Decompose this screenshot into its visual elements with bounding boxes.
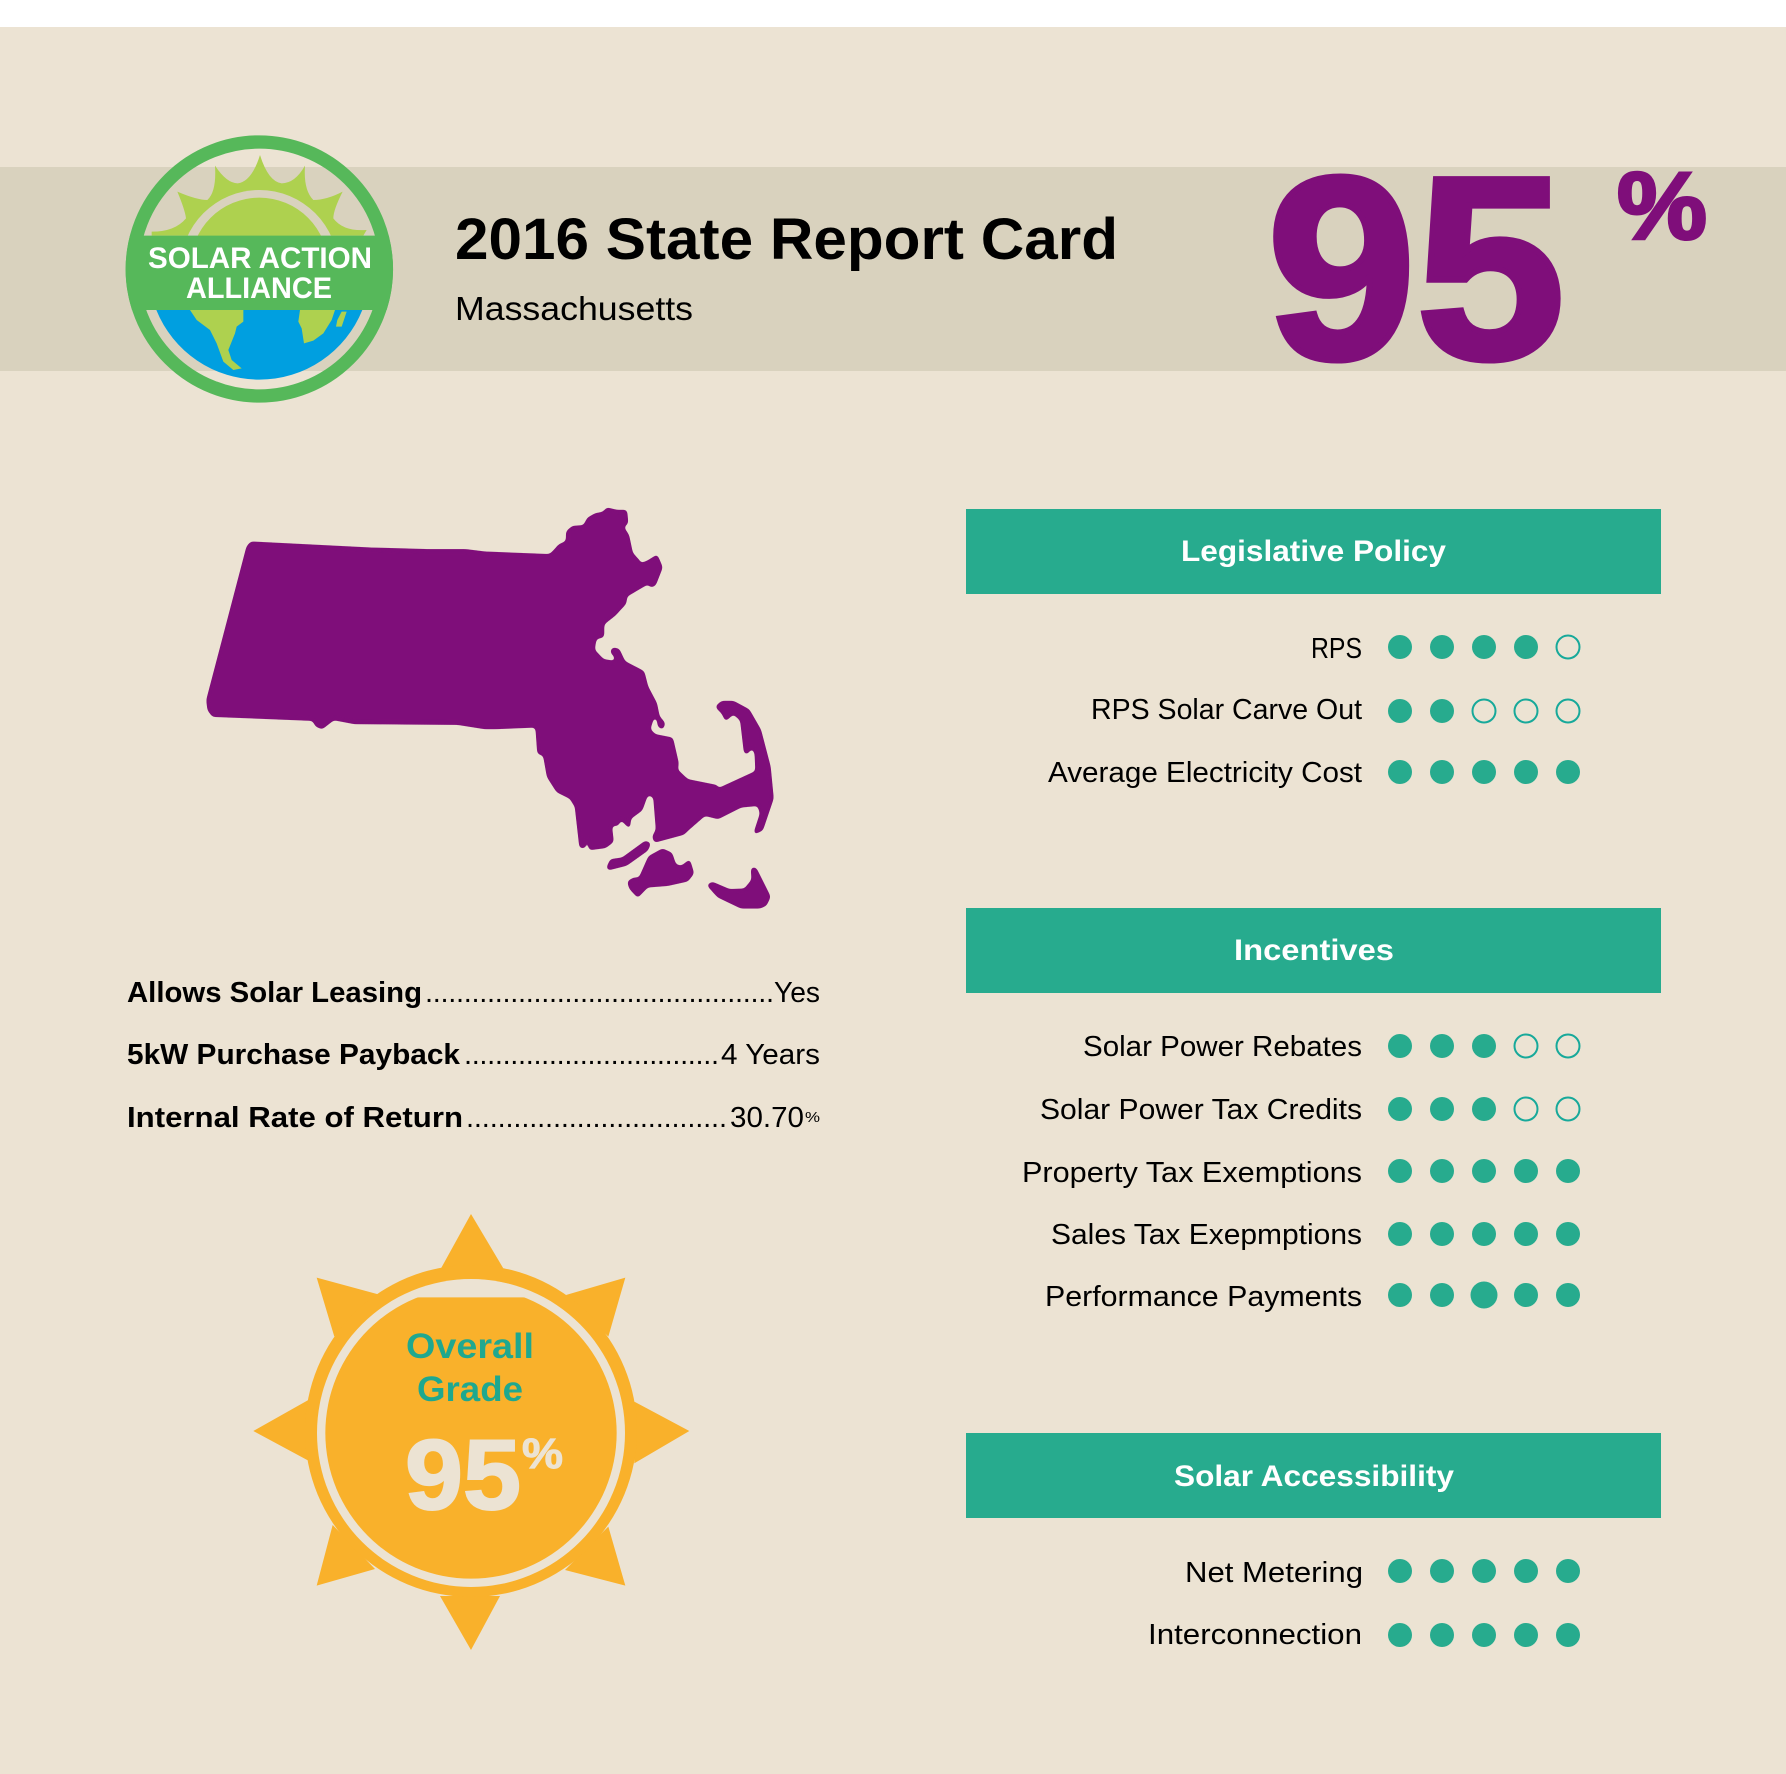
big score percent sign: % <box>1617 153 1707 260</box>
badge: overall grade sun: Grade <box>417 1370 523 1409</box>
heading bar: Solar Accessibility <box>1174 1460 1454 1493</box>
panel: legislative policy <box>966 509 1661 789</box>
panel: solar accessibility <box>966 1433 1661 1651</box>
logo ring <box>132 142 386 396</box>
row: Sales Tax Exepmptions: Sales Tax Exepmptions <box>1051 1219 1362 1251</box>
stat: rate of return: 30.70 <box>730 1102 804 1134</box>
icon: sun rays <box>253 1214 689 1650</box>
heading bar: Legislative Policy <box>1181 535 1446 568</box>
row: Average Electricity Cost <box>1048 757 1580 789</box>
badge percent sign: % <box>522 1430 563 1478</box>
stat: solar leasing: Yes <box>774 977 820 1009</box>
row: RPS Solar Carve Out: RPS Solar Carve Out <box>1091 694 1362 726</box>
stat: purchase payback <box>127 1039 820 1071</box>
icon: globe <box>156 310 362 380</box>
row: Solar Power Rebates <box>1083 1031 1580 1063</box>
stats list <box>127 977 820 1134</box>
row: Average Electricity Cost: Average Electricity Cost <box>1048 757 1362 789</box>
row: Performance Payments: Performance Payments <box>1045 1281 1362 1313</box>
row: Property Tax Exemptions: Property Tax Exemptions <box>1022 1157 1362 1189</box>
logo: Solar Action Alliance <box>126 142 393 396</box>
stat: rate of return <box>127 1102 820 1134</box>
row: RPS: RPS <box>1311 633 1362 665</box>
heading bar <box>966 908 1661 993</box>
stat: rate of return: % <box>805 1109 820 1126</box>
icon: sun rays <box>152 155 367 236</box>
stat: purchase payback: 4 Years <box>721 1039 820 1071</box>
stat: solar leasing <box>127 977 820 1009</box>
heading bar <box>966 509 1661 594</box>
big score: 95 <box>1267 124 1565 414</box>
badge score: 95 <box>405 1419 521 1530</box>
logo banner <box>126 236 393 310</box>
badge label: Overall <box>406 1327 534 1366</box>
stat: solar leasing: ............................................. <box>425 977 774 1009</box>
logo text: SOLAR ACTION <box>148 242 372 275</box>
badge: overall grade sun <box>253 1214 689 1650</box>
row: RPS <box>1311 633 1580 665</box>
stat: solar leasing: Allows Solar Leasing <box>127 977 422 1009</box>
row: Performance Payments <box>1045 1281 1580 1313</box>
map: Massachusetts <box>207 508 773 908</box>
stat: purchase payback: 5kW Purchase Payback <box>127 1039 461 1071</box>
stat: rate of return: Internal Rate of Return <box>127 1102 463 1134</box>
heading bar <box>966 1433 1661 1518</box>
row: Net Metering: Net Metering <box>1185 1557 1363 1589</box>
row: Solar Power Tax Credits <box>1040 1094 1580 1126</box>
title: 2016 State Report Card <box>455 207 1118 272</box>
heading bar: Incentives <box>1234 934 1394 967</box>
logo: Solar Action Alliance: ALLIANCE <box>186 272 332 305</box>
row: Sales Tax Exepmptions <box>1051 1219 1580 1251</box>
row: Net Metering <box>1185 1557 1580 1589</box>
row: Property Tax Exemptions <box>1022 1157 1580 1189</box>
panel: incentives <box>966 908 1661 1313</box>
row: RPS Solar Carve Out <box>1091 694 1580 726</box>
header band <box>0 167 1786 371</box>
stat: purchase payback: ................................. <box>464 1039 719 1071</box>
row: Interconnection: Interconnection <box>1148 1619 1362 1651</box>
subtitle: state name: Massachusetts <box>455 290 693 327</box>
row: Interconnection <box>1148 1619 1580 1651</box>
row: Solar Power Tax Credits: Solar Power Tax Credits <box>1040 1094 1362 1126</box>
stat: rate of return: ................................. <box>466 1102 727 1134</box>
row: Solar Power Rebates: Solar Power Rebates <box>1083 1031 1362 1063</box>
